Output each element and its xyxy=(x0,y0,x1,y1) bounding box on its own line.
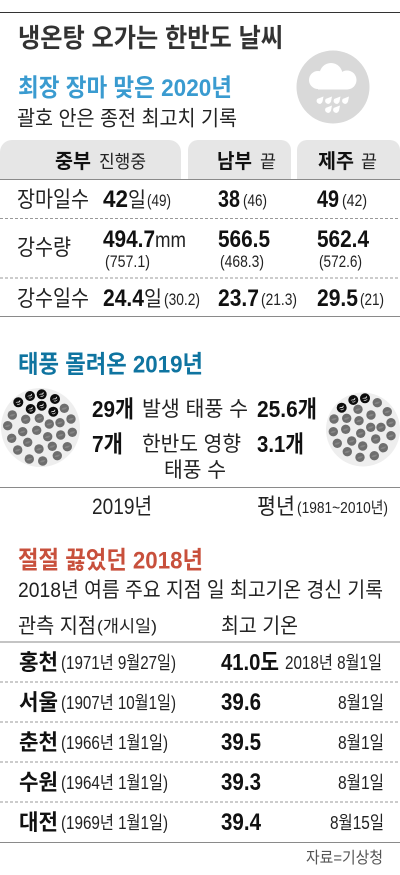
table row: Daejeon: (1969년 1월1일) xyxy=(61,813,168,833)
stat row: typhoons affecting the peninsula: 한반도 영향 xyxy=(142,433,241,456)
stat row: typhoons affecting the peninsula xyxy=(92,431,304,482)
table row: rainfall: (572.6) xyxy=(319,252,362,271)
table row: Chuncheon: 춘천 xyxy=(19,730,58,755)
table row: Seoul: (1907년 10월1일) xyxy=(61,693,176,713)
table row: rainfall: 566.5 xyxy=(218,226,270,253)
label: average years xyxy=(257,494,388,519)
table row: Daejeon xyxy=(19,809,384,836)
stat row: typhoons formed: 발생 태풍 수 xyxy=(142,398,248,421)
table row: Chuncheon: 8월1일 xyxy=(338,733,384,753)
table row: Suwon: (1964년 1월1일) xyxy=(61,773,168,793)
stat row: typhoons affecting the peninsula: 3.1개 xyxy=(257,431,304,457)
table header xyxy=(18,615,298,638)
table tabs: regions xyxy=(0,140,400,180)
table row: Hongcheon: 홍천 xyxy=(19,650,58,675)
table row: Seoul: 39.6 xyxy=(221,689,261,716)
stat row: typhoons formed: 29개 xyxy=(92,396,134,422)
stat row: typhoons formed xyxy=(92,396,317,422)
icon: rain cloud xyxy=(296,50,370,124)
table row: rainy days: 42 xyxy=(103,186,128,213)
table row: rainfall: 494.7 xyxy=(103,226,155,253)
table row: rainfall: 강수량 xyxy=(17,235,71,260)
table tabs: regions: 중부 xyxy=(55,151,91,173)
table header: 관측 지점 xyxy=(18,615,96,638)
table row: Seoul: 서울 xyxy=(19,690,58,715)
heading: 2019: 태풍 몰려온 2019년 xyxy=(18,350,203,378)
table row: days of rain: 29.5 xyxy=(317,285,358,312)
table tabs: regions: 남부 xyxy=(217,150,252,173)
table tabs: regions: 끝 xyxy=(260,152,276,172)
heading: 2020: 최장 장마 맞은 2020년 xyxy=(18,74,232,102)
table row: days of rain: 24.4 xyxy=(103,285,145,312)
table row: Suwon: 8월1일 xyxy=(338,773,384,793)
table row: rainfall: (757.1) xyxy=(105,252,150,271)
icon: average typhoon dots xyxy=(326,392,400,466)
table row: Hongcheon: 41.0도 xyxy=(221,649,279,675)
stat row: typhoons formed: 25.6개 xyxy=(257,396,317,422)
table row: Hongcheon: 2018년 8월1일 xyxy=(285,653,382,673)
label: 2019: 2019년 xyxy=(92,494,152,519)
table row: rainfall: (468.3) xyxy=(220,252,264,271)
table row: rainy days xyxy=(17,186,367,213)
table row: rainfall xyxy=(17,226,370,271)
table row: Seoul xyxy=(19,689,384,716)
table row: rainy days: 장마일수 xyxy=(17,187,89,212)
table header: 최고 기온 xyxy=(221,615,298,638)
table row: rainy days: 49 xyxy=(317,186,339,213)
table row: days of rain: (21) xyxy=(360,290,384,309)
table row: rainfall: 562.4 xyxy=(317,226,370,253)
subheading: 2020: 괄호 안은 종전 최고치 기록 xyxy=(17,108,237,130)
table row: Hongcheon xyxy=(19,649,382,675)
table header: (개시일) xyxy=(97,617,157,636)
table tabs: regions: 진행중 xyxy=(99,152,146,172)
table row: rainy days: 38 xyxy=(218,186,240,213)
table row: Chuncheon: 39.5 xyxy=(221,729,261,756)
panel: 2019 typhoons xyxy=(0,350,400,519)
table row: days of rain: 강수일수 xyxy=(17,286,89,311)
table row: Suwon xyxy=(19,769,384,796)
heading: 2018: 절절 끓었던 2018년 xyxy=(18,546,203,574)
table row: Chuncheon: (1966년 1월1일) xyxy=(61,733,168,753)
table row: days of rain xyxy=(17,285,384,312)
icon: 2019 typhoon dots xyxy=(1,388,80,467)
table row: rainy days: (42) xyxy=(342,191,367,210)
table row: Seoul: 8월1일 xyxy=(338,693,384,713)
table row: Chuncheon xyxy=(19,729,384,756)
title: 냉온탕 오가는 한반도 날씨 xyxy=(18,23,283,53)
label: average years: 평년 xyxy=(257,494,295,519)
table tabs: regions: 제주 xyxy=(318,150,354,173)
table row: rainy days: (49) xyxy=(147,191,171,210)
table row: Suwon: 39.3 xyxy=(221,769,261,796)
table row: days of rain: (30.2) xyxy=(164,290,200,309)
table row: rainy days: 일 xyxy=(128,189,146,212)
table row: days of rain: 일 xyxy=(144,288,162,311)
table row: rainfall: mm xyxy=(155,229,186,252)
table row: rainy days: (46) xyxy=(243,191,267,210)
source credit: 자료=기상청 xyxy=(306,849,383,867)
panel: 2020 monsoon xyxy=(0,50,400,317)
table row: Daejeon: 대전 xyxy=(19,810,58,835)
table tabs: regions: 끝 xyxy=(361,152,377,172)
table row: Daejeon: 8월15일 xyxy=(330,813,384,833)
table row: Suwon: 수원 xyxy=(19,770,58,795)
table row: Daejeon: 39.4 xyxy=(221,809,262,836)
table row: days of rain: (21.3) xyxy=(261,290,297,309)
table row: days of rain: 23.7 xyxy=(218,285,259,312)
stat row: typhoons affecting the peninsula: 7개 xyxy=(92,431,123,457)
table row: Hongcheon: (1971년 9월27일) xyxy=(61,653,176,673)
panel: 2018 heat xyxy=(0,546,400,843)
stat row: typhoons affecting the peninsula: 태풍 수 xyxy=(164,459,226,482)
label: average years: (1981~2010년) xyxy=(297,499,388,517)
